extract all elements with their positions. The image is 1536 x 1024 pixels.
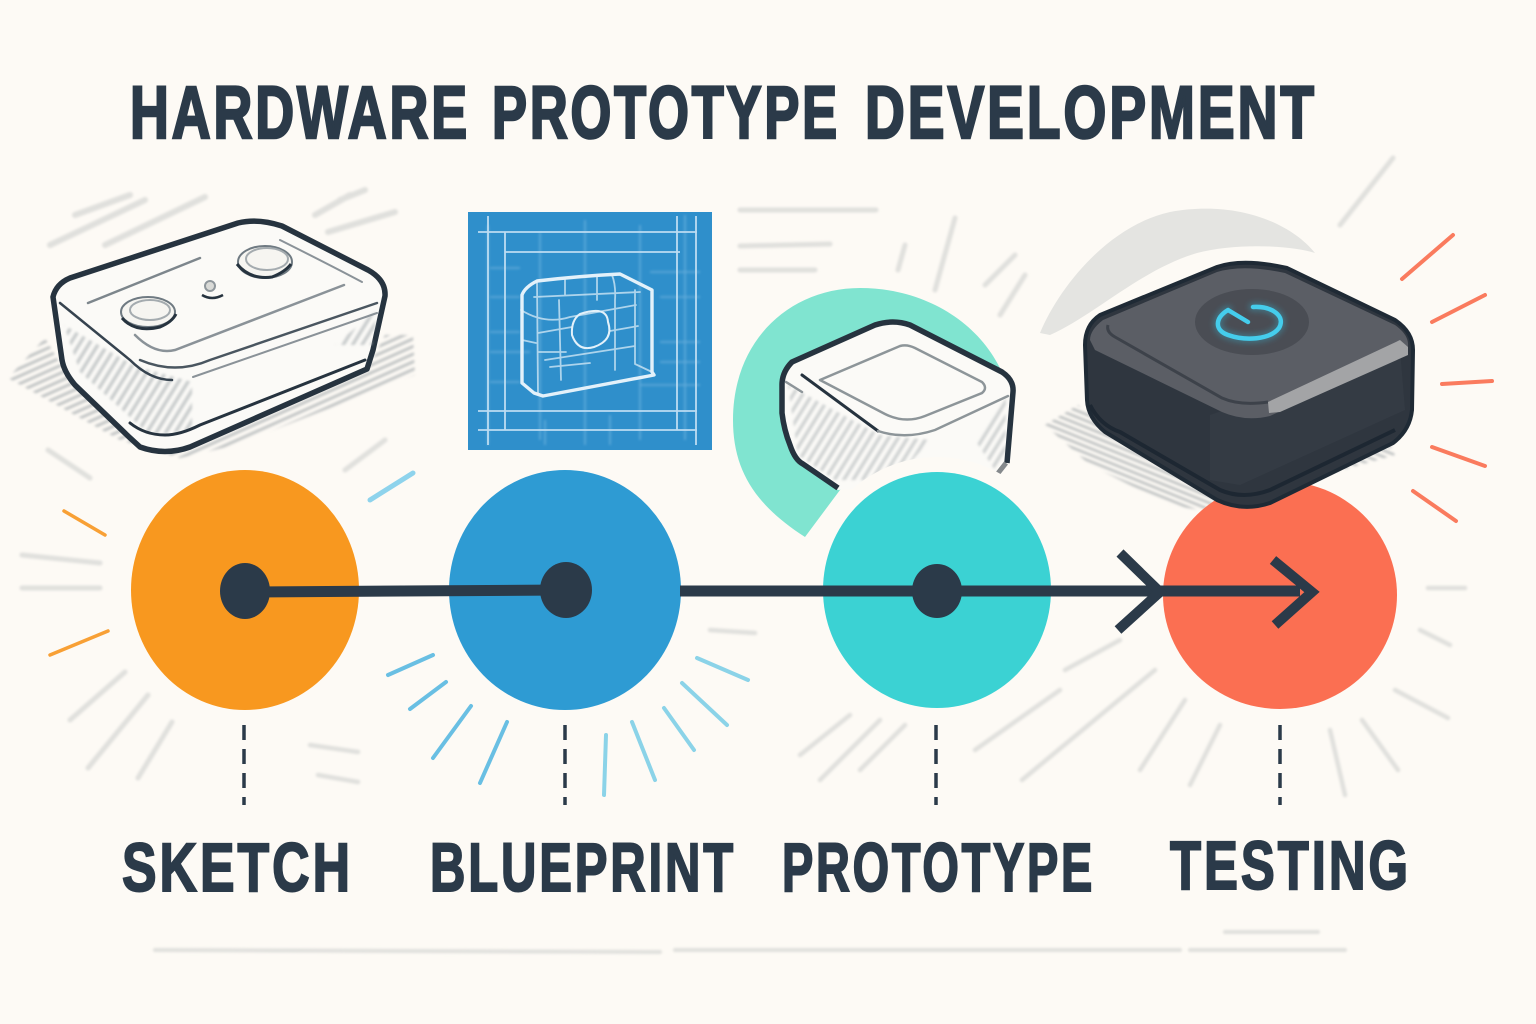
device top edge line xyxy=(1108,325,1268,403)
circle: blueprint xyxy=(449,470,681,710)
dot: sketch xyxy=(220,563,270,619)
title xyxy=(130,71,1317,154)
timeline dots xyxy=(220,562,962,619)
prototype top lines xyxy=(786,345,1008,435)
power icon xyxy=(1218,307,1281,339)
sketch device illustration xyxy=(8,221,415,458)
accent rays xyxy=(50,235,1492,795)
prototype device outline xyxy=(782,322,1013,488)
timeline line xyxy=(245,590,1300,592)
testing ground hatching xyxy=(1045,405,1395,510)
dashed connectors xyxy=(244,725,1280,805)
dot: prototype xyxy=(912,564,962,618)
label: sketch: SKETCH xyxy=(122,829,353,906)
testing illustration xyxy=(1040,209,1395,510)
prototype side shading xyxy=(788,385,1006,480)
step labels xyxy=(122,827,1411,906)
title: HARDWARE xyxy=(130,71,470,154)
label: prototype: PROTOTYPE xyxy=(782,829,1095,906)
device highlight strip xyxy=(1268,340,1408,413)
mint backdrop blob xyxy=(733,288,1000,537)
sketch left button xyxy=(121,297,176,329)
blue rays left xyxy=(388,655,507,783)
blueprint frame lines xyxy=(478,216,697,445)
sketch right button xyxy=(237,246,292,278)
step circles xyxy=(131,457,1397,723)
device side sheen xyxy=(1210,350,1405,485)
midway chevron xyxy=(1118,553,1160,630)
orange rays xyxy=(50,511,108,655)
sketch indicator light xyxy=(202,281,223,298)
power button halo xyxy=(1195,289,1309,355)
grey crescent backdrop xyxy=(1040,209,1315,335)
title: PROTOTYPE xyxy=(492,71,840,154)
red rays xyxy=(1402,235,1492,521)
blueprint faint grid xyxy=(488,215,700,445)
white halo around prototype circle xyxy=(807,457,1067,723)
background sketch marks xyxy=(22,158,1465,952)
prototype illustration xyxy=(733,288,1013,537)
sketch ground hatching xyxy=(8,335,415,458)
sketch device body xyxy=(53,221,385,452)
title: DEVELOPMENT xyxy=(865,71,1317,154)
prototype outline gray stub xyxy=(995,463,1006,477)
circle: testing xyxy=(1163,481,1397,709)
label: blueprint: BLUEPRINT xyxy=(430,829,736,906)
label: testing: TESTING xyxy=(1170,827,1411,904)
sketch blue ray xyxy=(370,473,413,500)
arrow head xyxy=(1273,560,1312,625)
circle: sketch xyxy=(131,470,359,710)
device lower band xyxy=(1090,405,1395,495)
blueprint device drawing xyxy=(521,274,654,396)
sketch top details xyxy=(60,240,377,435)
blueprint panel xyxy=(468,212,712,450)
circle: prototype xyxy=(823,472,1051,708)
testing device xyxy=(1085,263,1413,507)
dot: blueprint xyxy=(540,562,592,618)
blueprint background xyxy=(468,212,712,450)
blue rays right xyxy=(604,658,748,795)
timeline arrow xyxy=(245,553,1312,630)
prototype device body xyxy=(782,322,1013,490)
device top face xyxy=(1090,268,1408,418)
device body xyxy=(1085,263,1413,507)
sketch side shading xyxy=(64,310,377,435)
